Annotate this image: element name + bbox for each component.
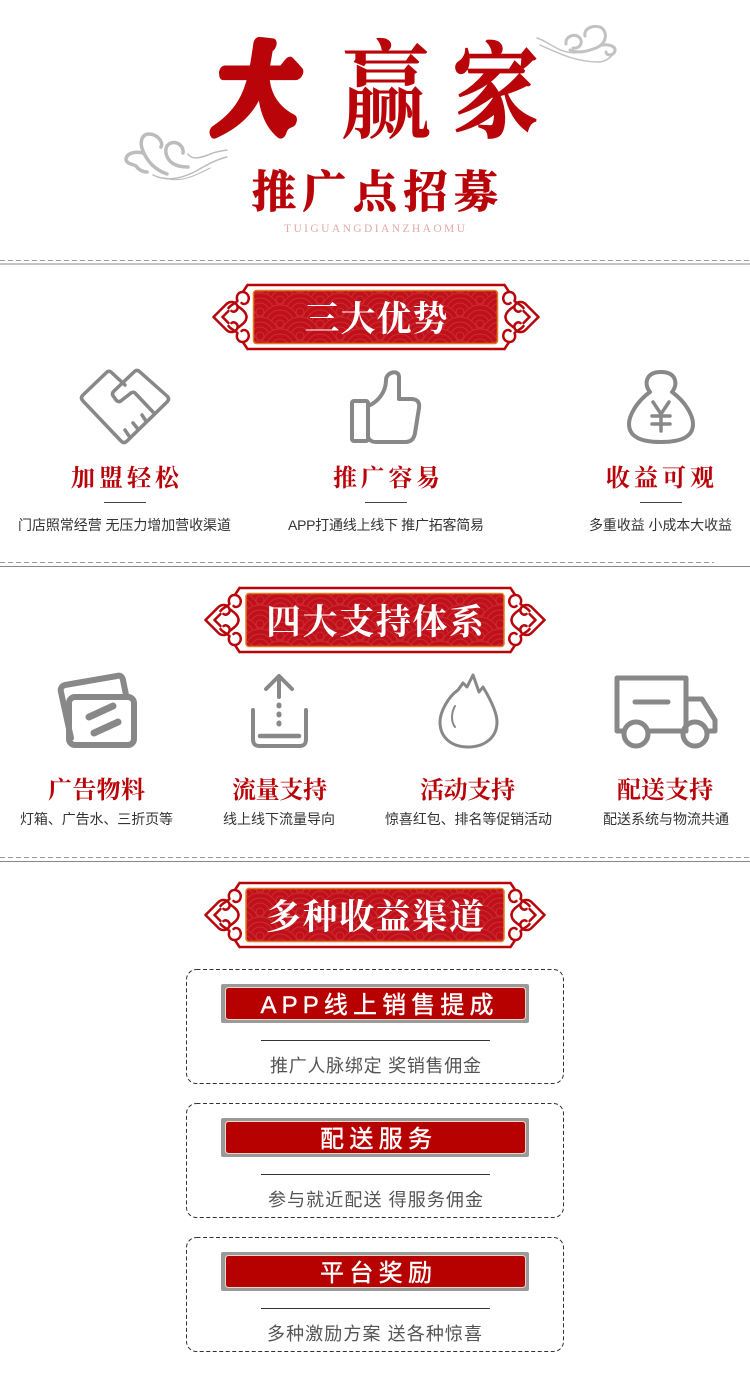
column: 推广容易 [288, 372, 484, 533]
label bar: APP线上销售提成 [260, 992, 494, 1019]
banner: 四大支持体系: 四大支持体系 [266, 603, 485, 642]
description: 惊喜红包、排名等促销活动 [385, 811, 552, 827]
right cloud decoration [537, 26, 615, 62]
icon: flame [440, 675, 497, 747]
heading: 配送支持 [617, 777, 713, 804]
header divider [0, 260, 750, 264]
heading: 广告物料 [48, 777, 145, 804]
description: 灯箱、广告水、三折页等 [20, 811, 173, 827]
label bar [221, 984, 529, 1023]
section divider [0, 562, 750, 566]
title character 大: 大 [210, 40, 306, 146]
banner: 三大优势: 三大优势 [304, 300, 448, 339]
description: 推广人脉绑定 奖销售佣金 [270, 1056, 481, 1076]
title character 赢: 赢 [340, 35, 431, 153]
description: 线上线下流量导向 [223, 811, 335, 827]
column: 流量支持 [223, 676, 335, 827]
description: 多重收益 小成本大收益 [589, 517, 732, 533]
banner: 多种收益渠道: 多种收益渠道 [266, 898, 484, 937]
column: 收益可观 [589, 372, 732, 533]
description: 配送系统与物流共通 [603, 811, 729, 827]
brand title: 大赢家 [210, 35, 538, 153]
label bar: 平台奖励 [320, 1260, 432, 1287]
icon: upload tray [253, 676, 306, 746]
heading: 流量支持 [232, 777, 327, 804]
column: 配送支持 [603, 678, 729, 827]
panel: 平台奖励 [186, 1238, 564, 1352]
title character 家: 家 [453, 36, 538, 151]
subtitle: 推广点招募: 推广点招募 [252, 168, 498, 217]
left cloud decoration [126, 134, 227, 180]
description: APP打通线上线下 推广拓客简易 [288, 517, 484, 533]
icon: handshake [82, 370, 168, 442]
banner: 三大优势 [214, 285, 538, 349]
heading: 收益可观 [606, 465, 714, 492]
heading: 加盟轻松 [71, 464, 181, 492]
section divider [0, 858, 750, 862]
heading: 活动支持 [420, 777, 515, 804]
icon: money bag [629, 372, 693, 442]
label bar: 配送服务 [320, 1126, 432, 1153]
icon: flyers [61, 676, 134, 745]
description: 门店照常经营 无压力增加营收渠道 [18, 517, 231, 533]
pinyin subtitle: TUIGUANGDIANZHAOMU [284, 223, 466, 235]
description: 多种激励方案 送各种惊喜 [267, 1324, 482, 1344]
label bar [221, 1252, 529, 1291]
column: 广告物料 [20, 676, 173, 827]
column: 活动支持 [385, 675, 552, 827]
icon: thumbs up [352, 372, 419, 442]
label bar [221, 1118, 529, 1157]
panel: 配送服务 [186, 1104, 564, 1218]
description: 参与就近配送 得服务佣金 [268, 1190, 483, 1210]
icon: delivery truck [617, 678, 715, 746]
column: 加盟轻松 [18, 370, 231, 533]
panel: APP线上销售提成 [186, 970, 564, 1084]
banner: 多种收益渠道 [206, 883, 544, 947]
heading: 推广容易 [333, 464, 440, 492]
banner: 四大支持体系 [206, 588, 544, 652]
